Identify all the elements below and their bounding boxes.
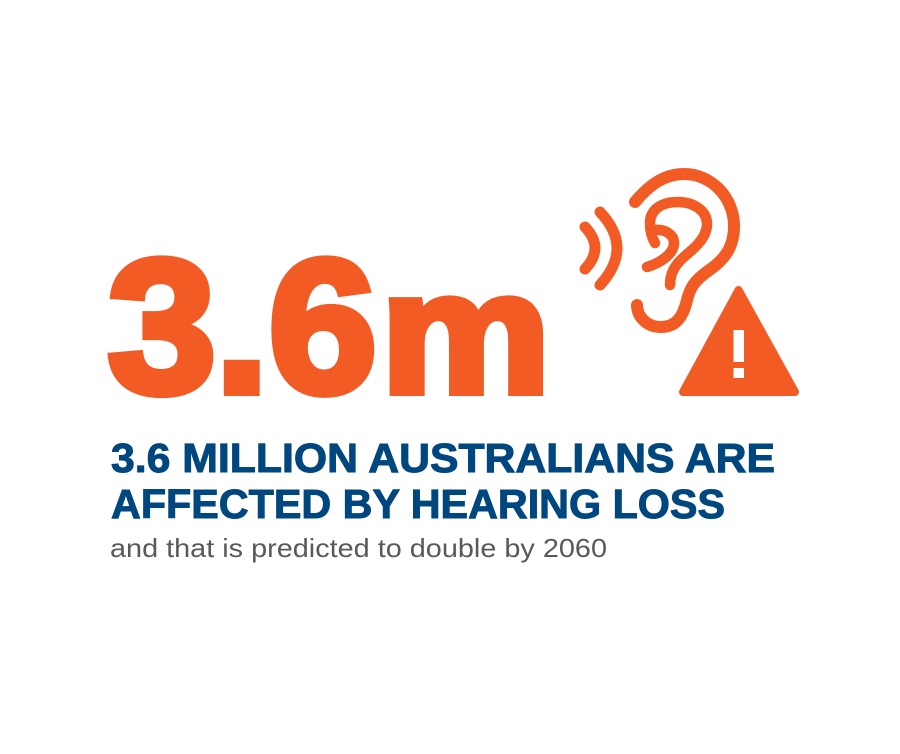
big number: 3.6m: 3.6 [107, 220, 377, 432]
heading: AFFECTED BY HEARING LOSS [111, 481, 725, 527]
icon: warning triangle [683, 290, 795, 392]
big number: 3.6m: m [381, 237, 550, 429]
icon: sound waves [585, 212, 617, 285]
big number: 3.6m [107, 220, 550, 432]
heading: 3.6 MILLION AUSTRALIANS ARE [111, 435, 775, 481]
heading [111, 435, 775, 527]
icon: ear [635, 174, 734, 327]
subheading: and that is predicted to double by 2060 [110, 533, 607, 563]
